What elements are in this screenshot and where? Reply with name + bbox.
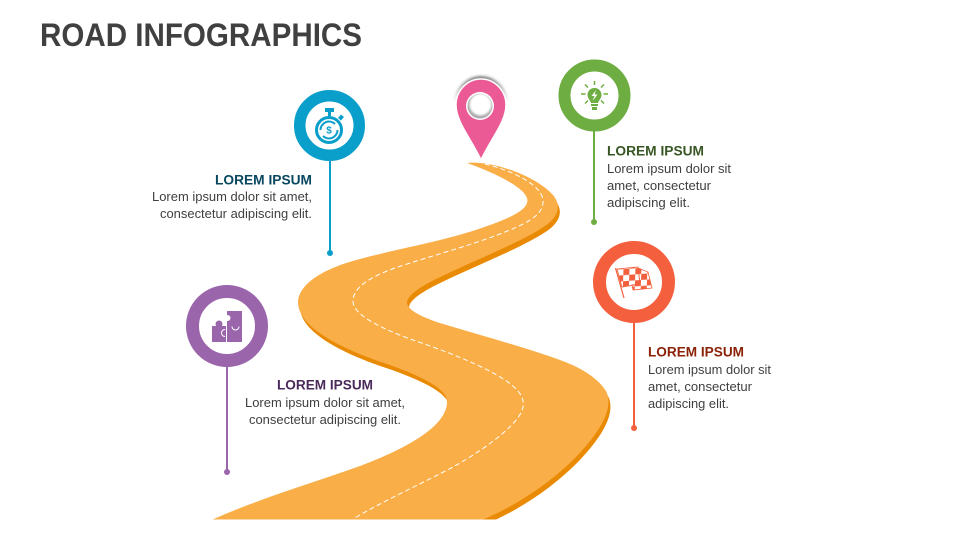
text block: green: LOREM IPSUM [607,144,704,158]
connector line [327,155,333,256]
icon: checkered flag [616,267,652,298]
icon: lightbulb [581,81,608,110]
callout: green lightbulb [564,66,624,225]
winding road [207,163,610,527]
text block: red: Lorem ipsum dolor sit [648,363,772,377]
icon: stopwatch: $ [326,126,332,136]
text block: blue: consectetur adipiscing elit. [160,207,312,221]
ring [300,96,359,155]
text block: green: adipiscing elit. [607,196,690,210]
callout: blue stopwatch [300,96,359,256]
text block: green: Lorem ipsum dolor sit [607,162,732,176]
text block: blue [152,172,312,221]
road side shadow [300,203,610,520]
connector line [224,360,230,475]
text block: blue: Lorem ipsum dolor sit amet, [152,190,312,204]
pin shadow [454,76,508,162]
text block: red [648,344,772,411]
ring [564,66,624,126]
map pin [454,76,508,162]
text block: red: adipiscing elit. [648,397,729,411]
pin body [456,79,506,160]
icon: puzzle pieces [212,311,242,342]
text block: purple: consectetur adipiscing elit. [249,413,401,427]
ring [192,292,262,360]
title: ROAD INFOGRAPHICS [40,17,362,53]
road surface [207,163,608,522]
text block: purple [245,378,405,427]
connector line [591,125,597,225]
ring [600,248,668,316]
text block: purple: Lorem ipsum dolor sit amet, [245,396,405,410]
text block: purple: LOREM IPSUM [277,378,373,392]
text block: green [607,144,732,210]
pin hole [466,92,494,120]
text block: blue: LOREM IPSUM [215,172,312,188]
text block: red: LOREM IPSUM [648,344,744,360]
text block: green: amet, consectetur [607,179,711,193]
callout: purple puzzle [192,292,262,475]
connector line [631,315,637,431]
road centre dashed line [353,164,543,519]
callout: orange-red checkered flag [600,248,668,431]
text block: red: amet, consectetur [648,380,752,394]
icon: stopwatch [316,108,344,142]
